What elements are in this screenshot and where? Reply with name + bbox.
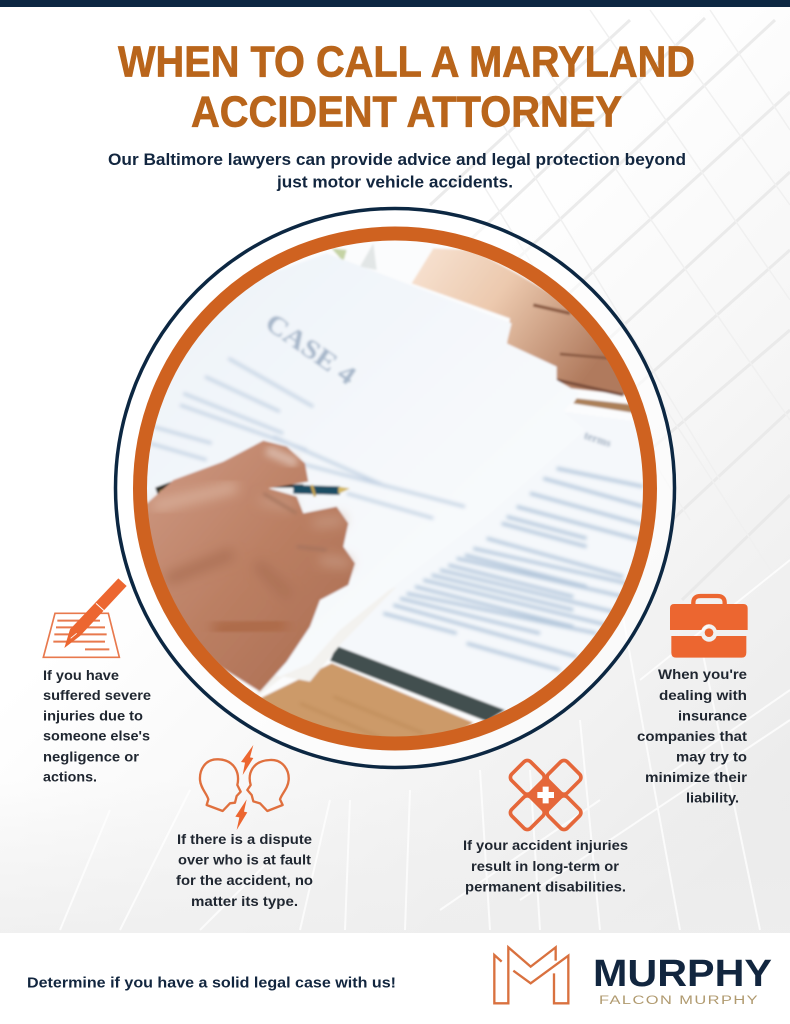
text: severe injuries: injuries due to bbox=[43, 708, 143, 724]
writing hand bbox=[143, 441, 355, 692]
subtitle: just motor vehicle accidents. bbox=[276, 174, 513, 192]
icon: briefcase bbox=[670, 596, 748, 658]
text: long-term disabilities: If your accident injuries bbox=[463, 838, 628, 854]
title: ACCIDENT ATTORNEY bbox=[191, 88, 622, 136]
text: fault dispute: matter its type. bbox=[191, 894, 298, 910]
text: insurance companies: dealing with bbox=[659, 688, 747, 704]
text: insurance companies: minimize their bbox=[645, 770, 747, 786]
upper hand bbox=[412, 248, 637, 413]
lower document bbox=[380, 431, 643, 674]
logo bbox=[494, 947, 772, 1007]
text: insurance companies: may try to bbox=[676, 750, 747, 766]
top sheet bbox=[140, 253, 585, 677]
text: severe injuries bbox=[43, 668, 151, 786]
title: WHEN TO CALL A MARYLAND bbox=[118, 38, 695, 86]
footer call to action: Determine if you have a solid legal case with us! bbox=[27, 974, 396, 992]
text: severe injuries: actions. bbox=[43, 770, 97, 786]
logo mark bbox=[494, 947, 568, 1003]
sheet text bbox=[150, 358, 465, 518]
text: severe injuries: If you have bbox=[43, 668, 119, 684]
text: insurance companies: When you're bbox=[658, 667, 747, 683]
outer navy ring bbox=[116, 208, 674, 768]
item: fault dispute bbox=[176, 745, 313, 910]
logo tagline: FALCON MURPHY bbox=[599, 995, 759, 1007]
pen bbox=[157, 485, 350, 497]
text: severe injuries: suffered severe bbox=[43, 688, 151, 704]
text: fault dispute: for the accident, no bbox=[176, 873, 313, 889]
icon: crossed bandages bbox=[508, 758, 583, 832]
text: long-term disabilities: result in long-term or bbox=[471, 859, 619, 875]
logo wordmark: MURPHY bbox=[593, 953, 772, 995]
clipboard edge bbox=[330, 646, 505, 721]
hand paper flap bbox=[258, 693, 261, 696]
text: severe injuries: someone else's bbox=[43, 728, 150, 744]
subtitle bbox=[108, 151, 686, 192]
orange ring bbox=[140, 234, 650, 744]
text: fault dispute bbox=[176, 832, 313, 910]
icon: pen and paper bbox=[43, 578, 127, 657]
text: insurance companies bbox=[637, 667, 747, 806]
item: severe injuries bbox=[43, 578, 151, 786]
text: severe injuries: negligence or bbox=[43, 750, 139, 766]
under paper bbox=[257, 590, 392, 693]
icon: two heads with lightning bbox=[200, 745, 289, 830]
text: insurance companies: companies that bbox=[637, 729, 747, 745]
item: long-term disabilities bbox=[463, 758, 628, 896]
text: insurance companies: liability. bbox=[686, 790, 739, 806]
text: long-term disabilities: permanent disabilities. bbox=[465, 880, 626, 896]
text: insurance companies: insurance bbox=[678, 708, 747, 724]
text: long-term disabilities bbox=[463, 838, 628, 896]
subtitle: Our Baltimore lawyers can provide advice and legal protection beyond bbox=[108, 151, 686, 169]
title bbox=[118, 38, 695, 136]
item: insurance companies bbox=[637, 596, 748, 806]
text: fault dispute: over who is at fault bbox=[178, 852, 311, 868]
photo: hands reviewing case papers bbox=[140, 230, 650, 750]
case heading: CASE 4 bbox=[260, 308, 361, 391]
text: fault dispute: If there is a dispute bbox=[177, 832, 312, 848]
lower document: terms bbox=[582, 430, 613, 450]
wood table bbox=[260, 662, 474, 736]
